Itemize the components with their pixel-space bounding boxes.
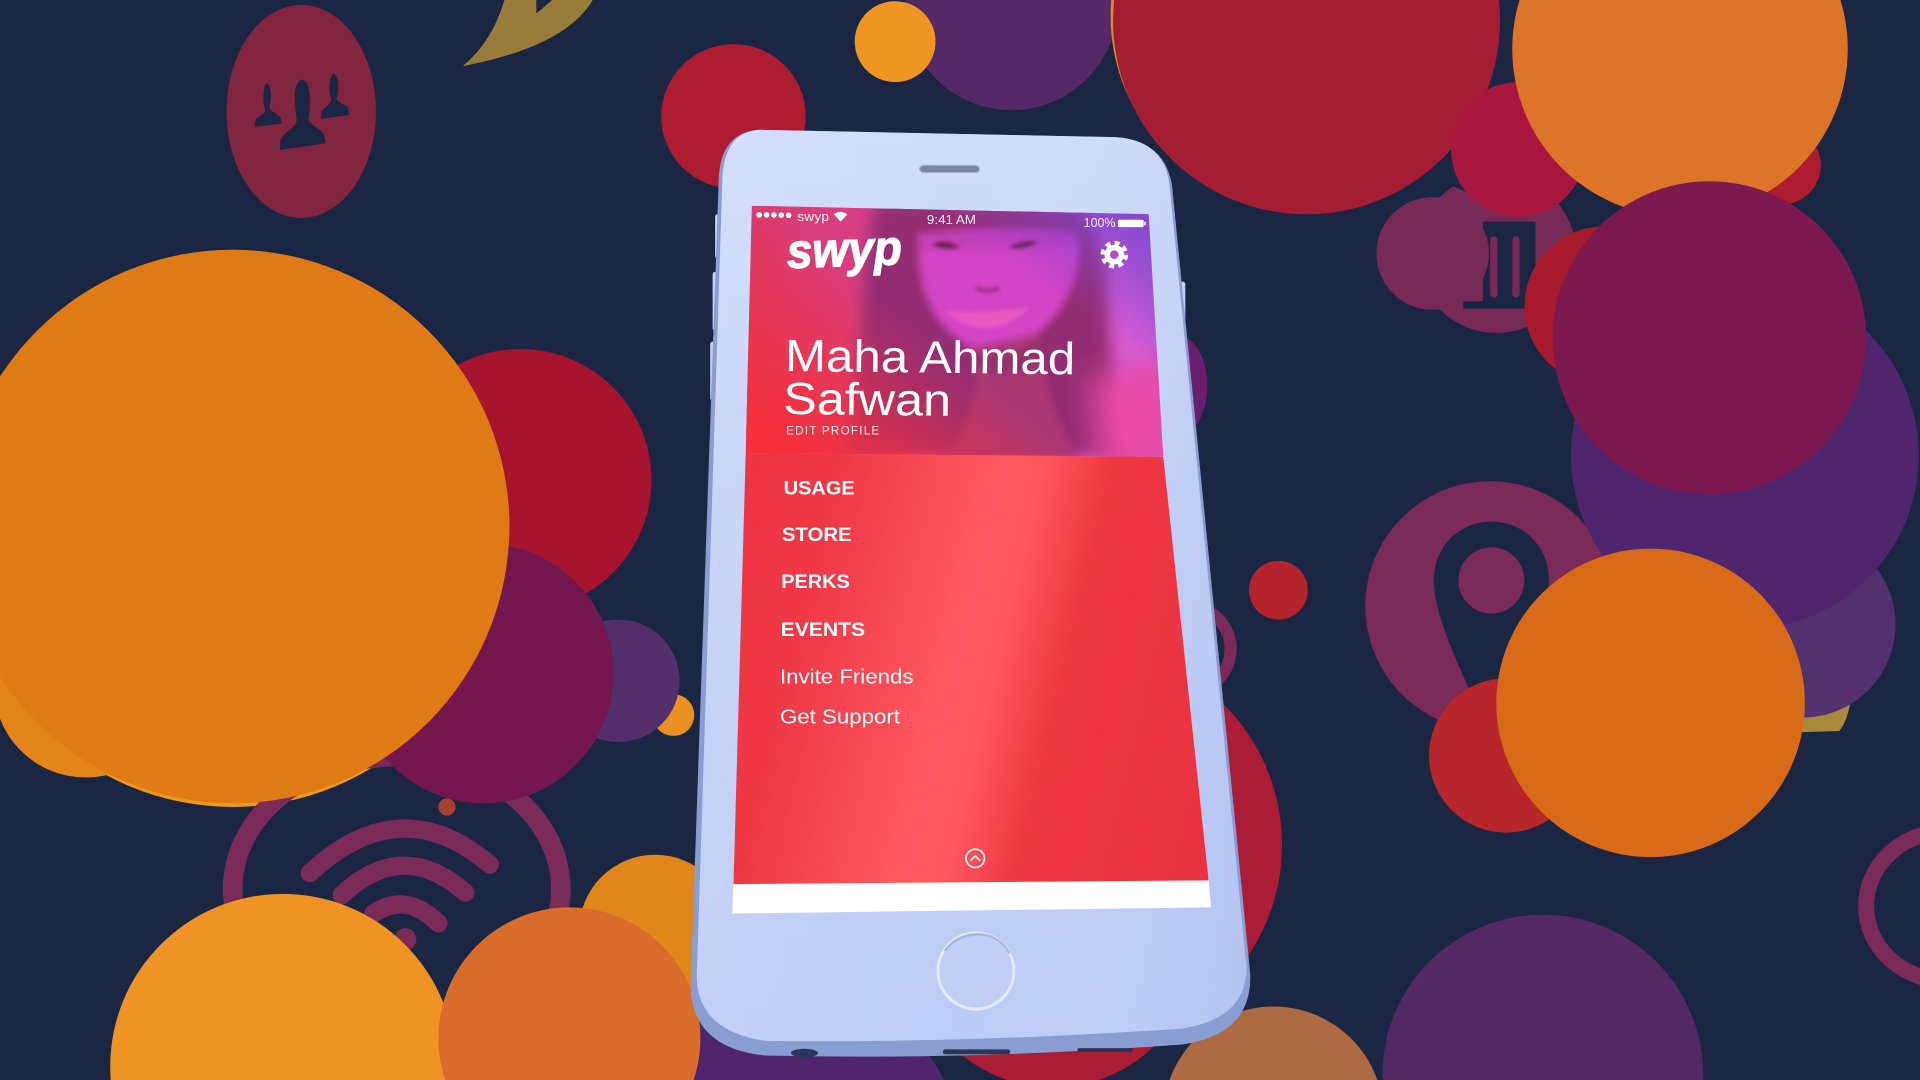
bottom left orange circles xyxy=(110,855,731,1080)
top right circles xyxy=(1111,0,1848,217)
icon: wifi badge xyxy=(0,250,613,1021)
swyp logo: swyp xyxy=(786,221,903,279)
profile name xyxy=(783,330,1076,427)
screen white strip xyxy=(732,878,1211,913)
plum behind phone xyxy=(1144,334,1207,437)
bottom circles xyxy=(551,647,1703,1080)
left circles cluster xyxy=(0,250,694,807)
edit profile link: EDIT PROFILE xyxy=(786,425,879,438)
menu items: Get Support xyxy=(780,707,900,729)
icon: ring right edge xyxy=(1866,831,1920,981)
phone side shading xyxy=(697,130,1247,1041)
ring behind phone xyxy=(1145,606,1231,692)
icon: museum badge xyxy=(1376,174,1576,333)
profile name: Safwan xyxy=(783,373,951,426)
speaker xyxy=(920,165,980,173)
menu items: PERKS xyxy=(781,571,850,593)
icon: settings gear xyxy=(1103,243,1126,266)
phone face xyxy=(697,130,1247,1041)
menu items: Invite Friends xyxy=(780,666,913,688)
icon: people badge xyxy=(227,5,376,218)
phone xyxy=(691,130,1250,1057)
status bar xyxy=(756,209,1146,230)
status bar: swyp xyxy=(797,209,829,224)
icon: location pin badge xyxy=(1365,481,1615,731)
profile header xyxy=(746,206,1164,457)
status bar: 100% xyxy=(1084,215,1116,230)
side buttons xyxy=(710,214,1185,400)
top centre circles xyxy=(661,0,1118,189)
phone ports xyxy=(791,1048,1133,1057)
right circles cluster xyxy=(1249,181,1919,857)
menu items: EVENTS xyxy=(781,619,865,641)
portrait shoulder glow xyxy=(1090,355,1176,471)
phone edge xyxy=(691,130,1250,1057)
status bar: 9:41 AM xyxy=(927,212,976,227)
menu items: USAGE xyxy=(784,478,855,500)
portrait photo xyxy=(845,202,1133,456)
home button xyxy=(938,933,1014,1009)
screen red menu xyxy=(733,453,1209,884)
profile name: Maha Ahmad xyxy=(785,330,1076,384)
menu items xyxy=(780,478,913,729)
icon: yellow crescent xyxy=(463,0,593,66)
icon: collapse chevron xyxy=(966,849,984,868)
menu items: STORE xyxy=(782,524,852,546)
